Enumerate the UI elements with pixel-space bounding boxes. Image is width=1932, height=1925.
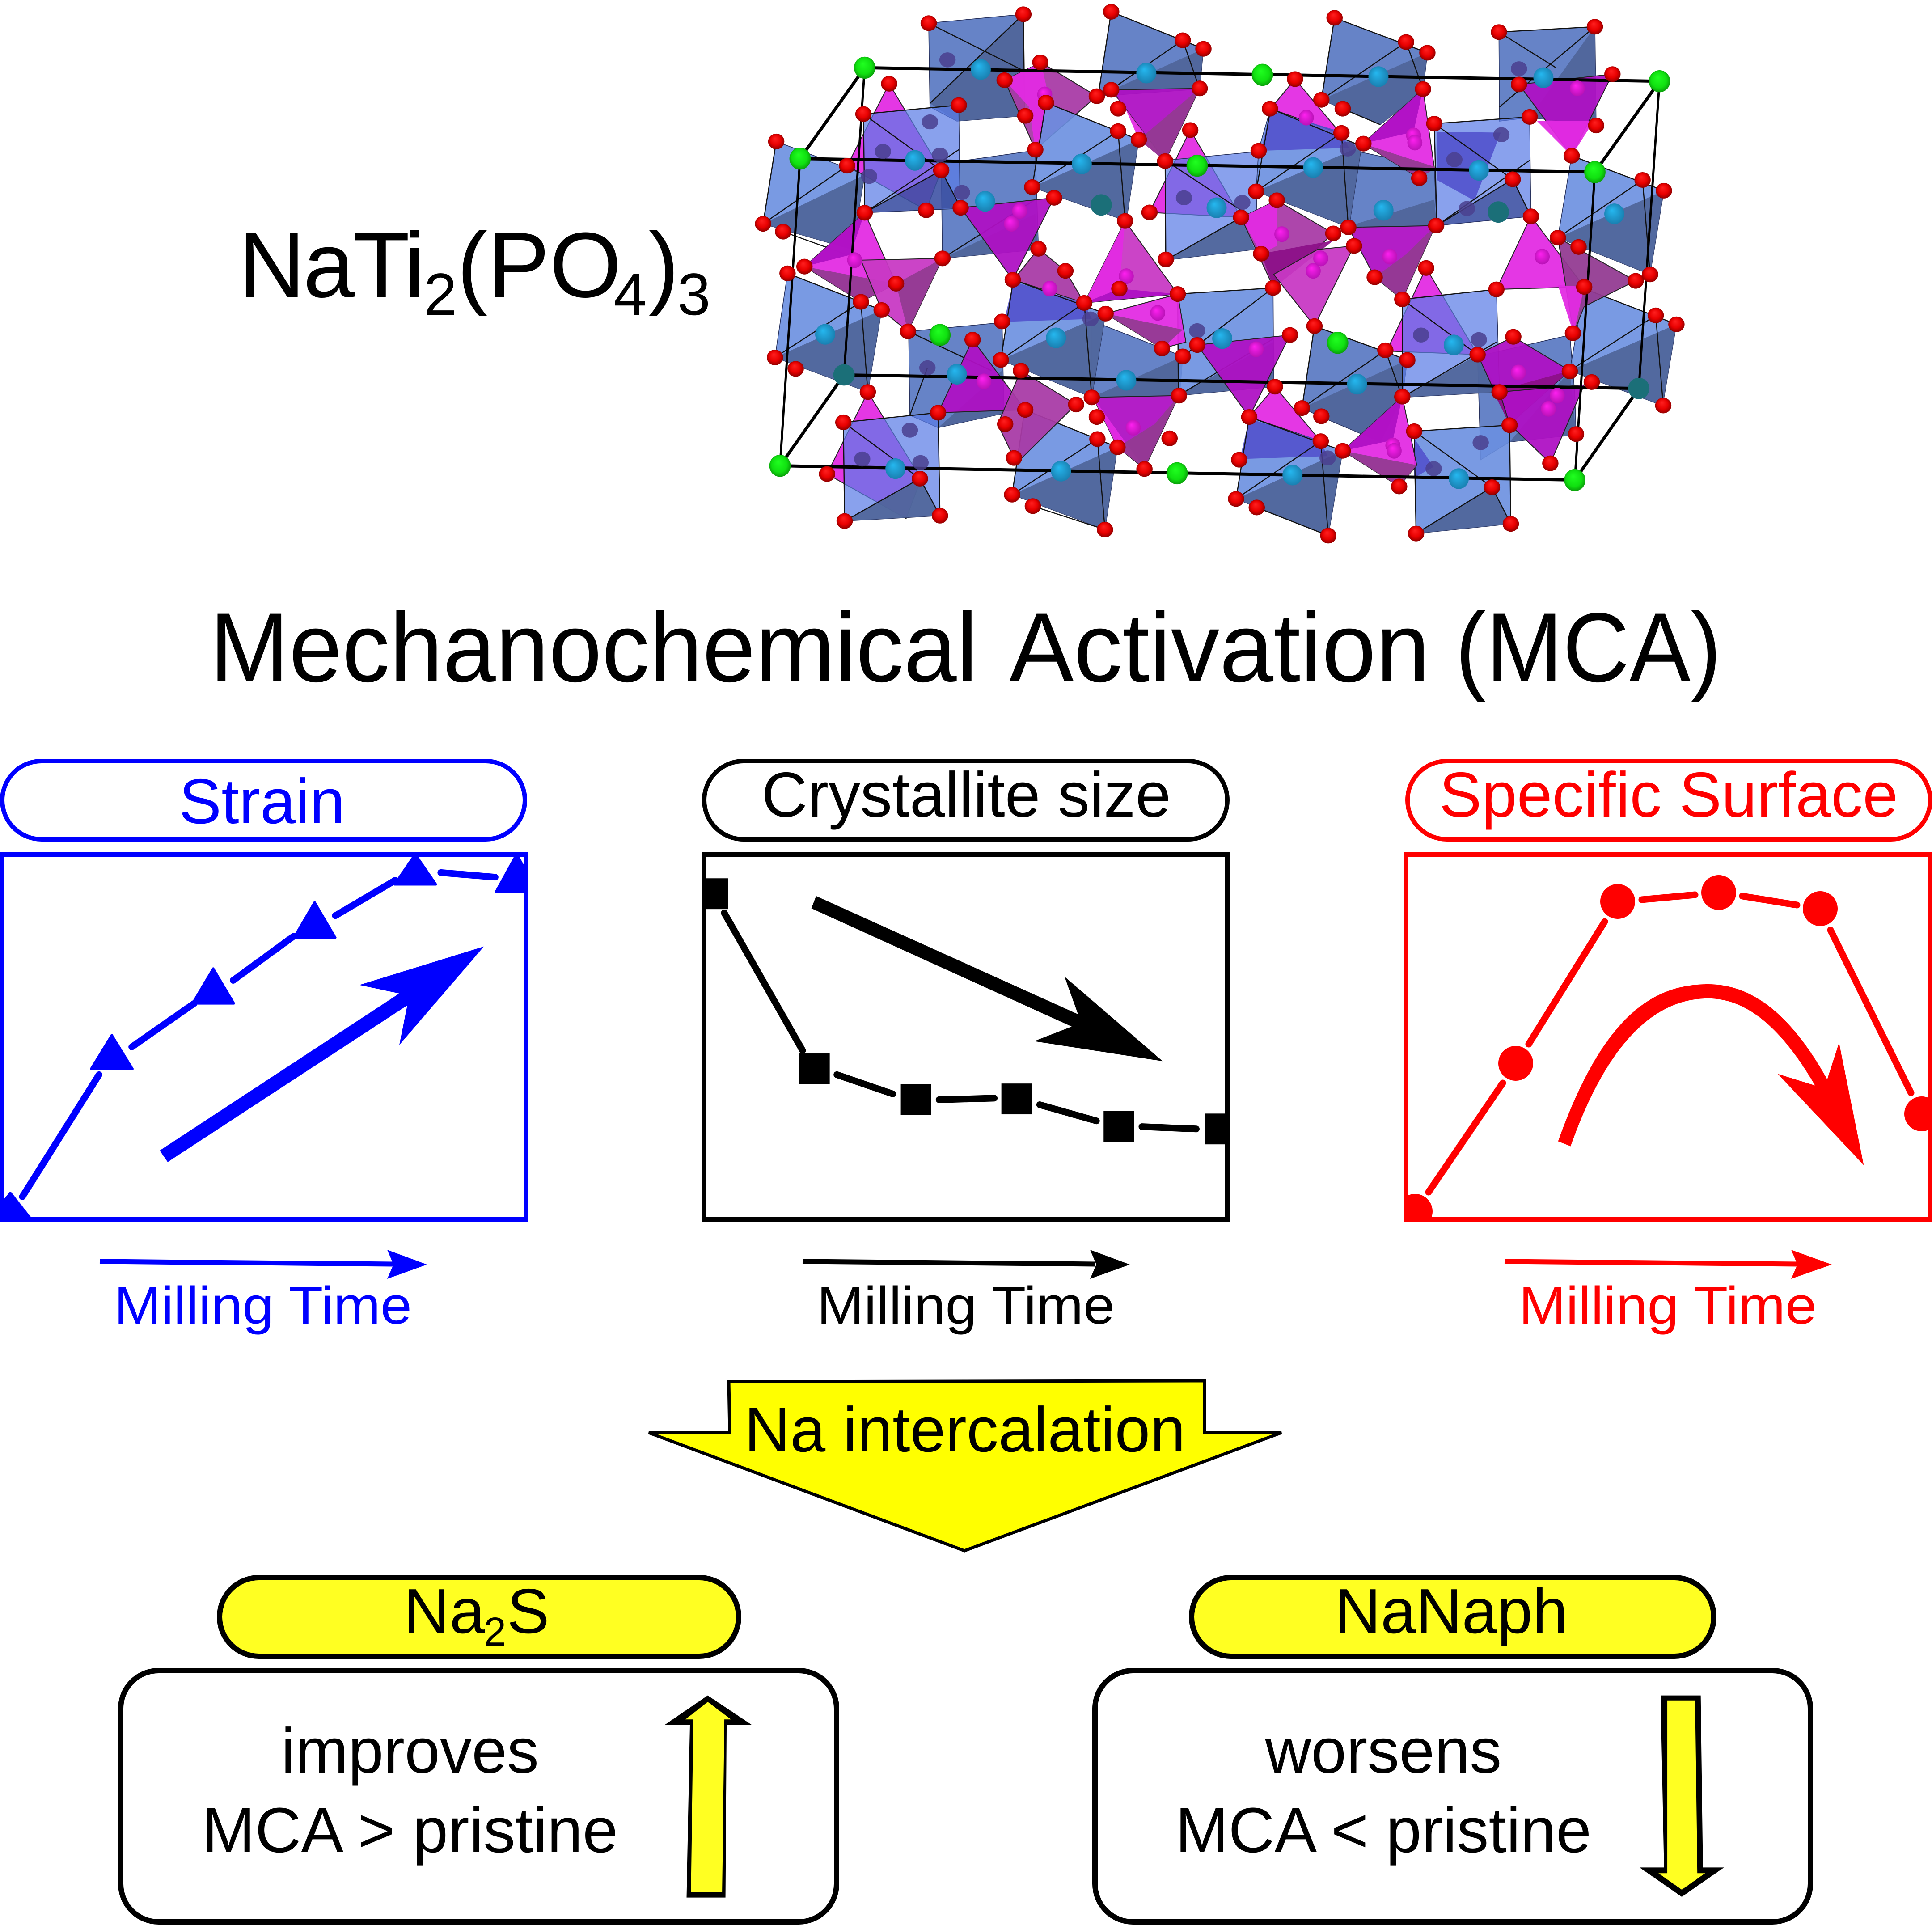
box: Na2S result: MCA > pristine — [202, 1795, 618, 1866]
blue octahedra, front layers — [843, 103, 1531, 536]
chart: strain versus milling time — [0, 854, 537, 1219]
arrow: milling time — [1505, 1250, 1832, 1279]
chart: crystallite size versus milling time — [701, 855, 1235, 1219]
unit cell frame — [780, 68, 1660, 480]
dark teal sodium atoms behind polyhedra — [833, 194, 1649, 399]
heading: Na2S pill — [220, 1576, 739, 1656]
box: Na2S result — [121, 1671, 837, 1922]
chemical formula: 3 — [677, 262, 710, 328]
arrow: milling time — [803, 1250, 1130, 1279]
box: NaNaph result — [1095, 1671, 1810, 1922]
heading: strain pill: Strain — [179, 766, 345, 837]
crystal structure — [755, 4, 1685, 543]
chemical formula: i — [404, 213, 425, 317]
heading: NaNaph pill: NaNaph — [1335, 1576, 1568, 1647]
chemical formula: a — [303, 213, 355, 317]
panel: crystallite size — [701, 759, 1235, 1335]
panel: Na2S — [121, 1576, 837, 1922]
box: NaNaph result: worsens — [1265, 1715, 1501, 1786]
icon: up arrow — [664, 1696, 752, 1898]
icon: down arrow — [1640, 1696, 1724, 1897]
central atoms inside polyhedra — [854, 52, 1527, 476]
blue octahedra, back layers — [763, 12, 1676, 460]
title: Activation — [1009, 592, 1430, 702]
chemical formula: N — [238, 213, 305, 317]
heading: crystallite size pill — [704, 759, 1227, 839]
heading: specific surface pill: Specific Surface — [1439, 759, 1898, 830]
arrow: rising then falling surface trend — [1558, 984, 1864, 1165]
heading: crystallite size pill: Crystallite size — [761, 759, 1171, 830]
title — [210, 592, 1721, 702]
magenta tetrahedra, front layer — [804, 74, 1636, 487]
magenta tetrahedra, back layer — [827, 62, 1478, 519]
heading: NaNaph pill — [1192, 1576, 1714, 1656]
arrow: milling time — [100, 1250, 427, 1279]
chemical formula: 4 — [613, 262, 647, 328]
chemical formula: 2 — [424, 262, 457, 328]
chemical formula: T — [353, 213, 410, 317]
title: (MCA) — [1455, 592, 1721, 702]
box: NaNaph result: MCA < pristine — [1175, 1795, 1591, 1866]
heading: Na2S pill: 2 — [484, 1610, 506, 1654]
arrow: falling crystallite size trend — [812, 896, 1163, 1061]
panel: specific surface — [1398, 759, 1932, 1335]
arrow: Na intercalation: Na intercalation — [744, 1394, 1185, 1465]
axis label: Milling Time — [114, 1276, 412, 1335]
chemical formula — [238, 213, 710, 328]
box: Na2S result: improves — [281, 1715, 539, 1786]
green sodium atoms — [769, 57, 1670, 491]
axis label: Milling Time — [817, 1276, 1115, 1335]
chemical formula: (PO — [457, 213, 621, 317]
chart: specific surface versus milling time — [1398, 855, 1932, 1229]
heading: Na2S pill: S — [507, 1576, 550, 1647]
panel: NaNaph — [1095, 1576, 1810, 1922]
arrow: rising strain trend — [160, 947, 484, 1162]
panel: strain — [0, 761, 537, 1335]
heading: strain pill — [2, 761, 525, 839]
axis label: Milling Time — [1519, 1276, 1817, 1335]
arrow: Na intercalation — [649, 1381, 1281, 1551]
title: Mechanochemical — [210, 592, 978, 702]
red oxygen atoms — [755, 4, 1685, 543]
chemical formula: ) — [648, 213, 679, 317]
heading: Na2S pill: Na — [404, 1576, 485, 1647]
